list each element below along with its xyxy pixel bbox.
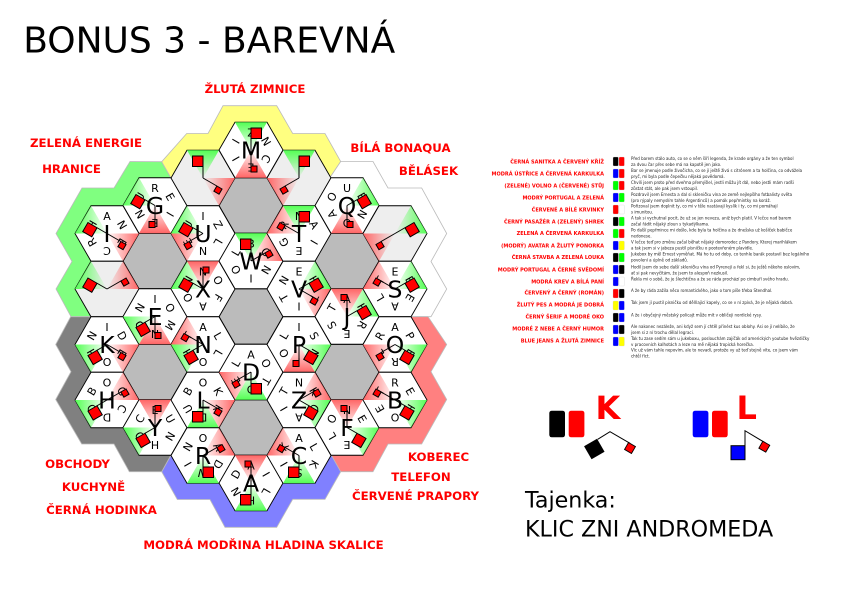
solution [524,487,773,543]
tile X: A [199,300,207,312]
tile Z: O [306,401,322,416]
clue table: story text [630,156,810,358]
tile J: H [354,301,369,315]
tile H: D [103,410,111,424]
tile Q: N [354,207,369,221]
tile M: Z [247,126,255,140]
colored border bands [56,106,447,527]
tile P: S [306,330,321,342]
tile J: J [342,303,350,331]
tile Q: O [342,216,351,229]
tile X: X [195,276,211,304]
clue table: story text: chtěl říct. [631,354,650,358]
tile O: A [391,321,399,334]
clue table: red labels: MODRÉ Z NEBE A ČERNÝ HUMOR [512,325,604,333]
tile N [171,317,235,372]
band: yellow [162,106,341,316]
tile Q [315,178,379,233]
tile V: I [297,300,301,312]
tile I: H [85,218,100,232]
tile J: S [325,319,340,331]
board labels: TELEFON [391,470,451,484]
clue table: story text: za dvou čar přes sebe má na kapotě jen jako. [631,162,721,167]
tile R: A [210,440,225,454]
clue table: story text: a tak jsem si v jabeza pustil písničku o pootevřeném plavidle. [631,246,753,250]
tile C [267,428,331,483]
tile I: E [114,236,129,248]
tile D: D [242,358,260,386]
tile Q: U [343,182,351,195]
tile P [267,317,331,372]
tile P: O [276,346,292,360]
tile V: V [291,276,307,304]
solution: KLIC ZNI ANDROMEDA [525,517,773,543]
tile M: I [230,137,243,146]
board labels: KOBEREC [408,450,469,464]
tile S: S [388,276,402,304]
clue table: red labels: ŽLUTÝ PES A MODRÁ JE DOBRÁ [517,301,604,309]
board labels: ZELENÁ ENERGIE [30,135,142,150]
tile L: L [196,386,210,414]
tile P: P [292,331,306,359]
tile Z [267,372,331,428]
tile V: N [277,274,292,287]
tile U: N [199,244,207,257]
tile J: A [343,293,351,306]
tile A: H [247,494,255,506]
board labels: ŽLUTÁ ZIMNICE [205,81,305,96]
board labels: ČERNÁ HODINKA [46,502,158,517]
tile G: U [133,190,148,204]
tile R: W [197,466,208,479]
clue table: story text: Tak jsem jí pustil písničku od dělňající kapely, co se v ní zpívá, že je nějaká dobrá. [630,300,793,305]
tile E: O [162,301,178,315]
tile O [363,317,427,372]
icon: connector K [584,432,635,459]
tile H: O [103,376,112,390]
clue table: red labels [492,157,605,345]
board labels: HRANICE [42,162,101,176]
tile S [363,261,427,317]
tile L: O [199,376,208,390]
tile C: L [307,441,321,454]
tile D: E [229,374,244,387]
tile J [315,289,379,344]
band: blue [162,316,341,527]
tile J: T [324,302,340,315]
tile Y: C [133,412,148,426]
tile B: B [387,386,403,414]
tile O: R [391,355,399,368]
tile F: F [340,414,354,442]
tile W: O [228,262,244,277]
board labels [30,81,480,552]
tile B: R [391,376,399,390]
band: green [56,162,251,317]
tile B [363,372,427,428]
tile O: B [402,346,417,360]
clue table: story text: Před barem stálo auto, co se o něm šíří legenda, že krade orgány a že ten symbol [631,156,794,161]
tile W: L [229,246,244,258]
tile X [171,261,235,317]
tile M: E [247,160,254,174]
clue table: story text: s imunitou. [631,210,653,214]
tile S: E [402,291,417,304]
tile I: A [103,210,111,223]
tile X: N [199,266,207,278]
legend example K [549,389,635,459]
tile N: O [198,355,207,368]
tile M: I [230,154,243,163]
tile U: U [181,218,196,232]
clue table: red labels: ČERNÁ STAVBA A ZELENÁ LOUKA [512,254,604,261]
tile T: T [291,220,307,248]
tile X: O [210,273,226,288]
blank tile right [363,206,427,261]
tile R: I [182,459,195,469]
tile C: A [295,432,303,445]
tile F: E [343,438,350,451]
tile Z: N [295,376,303,390]
board labels: MODRÁ MODŘINA HLADINA SKALICE [143,537,384,552]
tile C: S [295,466,302,479]
tile Y: H [151,438,159,451]
tile V: E [296,266,303,278]
tile C: I [278,459,291,469]
tile H: G [114,385,129,398]
tile Y: O [132,429,148,443]
tile K: O [102,355,111,368]
tile S: B [402,274,417,287]
clue table: story text: Pořizoval jsem doplnit ty, co mi v těle nastávají kyslík i ty, co mi pomáhají [631,204,779,208]
clue table: color chips [613,157,624,346]
tile U: Z [210,218,225,232]
tile G: R [151,182,159,195]
clue table: red labels: ZELENÁ A ČERVENÁ KARKULKA [517,230,604,237]
tile N: L [210,347,225,360]
tile K: D [114,329,129,343]
tile Z: Z [291,386,307,414]
clue table: red labels: MODRÝ PORTUGAL A ČERNÉ SVĚDOMÍ [498,266,604,274]
clue table: red labels: ČERNÝ ŠERIF A MODRÉ OKO [525,313,604,321]
tile R: R [195,442,211,470]
clue table: red labels: MODRÝ PORTUGAL A ZELENÁ [522,195,604,202]
clue table: red labels: ČERNÁ SANITKA A ČERVENÝ KŘÍŽ [510,157,604,165]
clue table: story text: jsem si z ní trochu dělal legraci. [630,330,694,335]
tile N: A [199,321,207,334]
tile Q: O [324,190,340,204]
tile K: E [114,347,129,359]
tile E: N [151,327,159,340]
blank tile left [75,261,139,317]
clue table: story text: A že i obyčejný městský policajt může mít v obličeji nordické rysy. [631,312,762,318]
tile A: A [243,470,259,498]
blank tile top right [267,150,331,206]
tile D: O [246,382,255,396]
tile R: D [210,457,225,471]
tile D: O [258,356,274,371]
tile A: N [229,485,244,498]
tile T: I [307,237,320,247]
chips: blue red [693,411,728,437]
tile S: L [373,291,387,303]
clue table: story text: Řekla mi o sobě, že je šlechtična a že se ráda prochází po cimbuří svého hradu. [631,276,789,282]
band: red [251,316,447,472]
clue table: story text: ať si pak nevyčítám, že jsem to alespoň nezkusil. [631,270,728,276]
tile H [75,372,139,428]
tile S: E [392,266,399,278]
clue table: story text: začal řádit nějaký zloun s tykadýlkama. [631,222,709,226]
tile H: C [114,402,129,415]
tile A: A [247,460,255,472]
board labels: OBCHODY [45,457,110,471]
tile P: N [306,346,321,360]
tile D: L [229,357,244,369]
tile E: E [148,303,162,331]
tile U: I [201,210,205,223]
tile M [219,122,283,178]
tile U: U [194,220,212,248]
tile K [75,317,139,372]
tile I [75,206,139,261]
tile O: P [402,330,417,342]
gray hexes [123,178,379,455]
clue table: story text: povolení a úplně od základů. [631,258,688,262]
tile J: R [354,318,369,332]
tile Z: A [295,410,303,424]
clue table: story text: zůstat stát, ale pak jsem vstoupil. [631,186,698,191]
tile U: E [181,236,196,248]
tile W: O [258,245,274,260]
tile W [219,233,283,289]
clue table: story text: Pozdravil jsem Ernesta a dal si skleničku vína ze země nejlepšího fotbalisty světa [631,192,793,197]
tile N: T [180,330,196,343]
clue table: red labels: ČERNÝ PASAŽÉR A (ZELENÝ) SHREK [504,217,605,225]
clue table: story text: A tak si vychutnal pocit, že už se jen nevezu, aniž bych platil. V lečce nad barem [631,216,791,220]
tile I: C [103,244,111,257]
tile N: H [181,346,196,360]
tile T: N [295,210,303,223]
tile L: K [210,402,225,416]
tile J: E [343,327,350,340]
tile Q: B [354,190,369,204]
tile G [123,178,187,233]
tile T: R [277,218,292,232]
tile N: L [211,330,225,343]
tile H: H [98,386,116,414]
tile E: D [133,318,148,332]
hex board [75,122,427,511]
tile V: H [306,274,321,287]
tile F: L [325,429,339,442]
tile W: N [258,263,273,276]
clue table: red labels: MODRÁ ÚSTŘICE A ČERVENÁ KARKULKA [492,171,604,178]
tile A [219,455,283,511]
tile M: M [241,136,261,164]
title: BONUS 3 - BAREVNÁ [23,20,396,62]
tile V: T [306,290,322,304]
tile W: I [249,272,253,284]
tile I: N [114,218,129,232]
clue table: story text: (pro rýpaly nemyslím tahle Argentinců) a pomák pepřmintky na koráž. [631,198,771,203]
tile N: N [194,331,212,359]
tile C: K [306,458,321,471]
tile X: N [181,274,196,287]
tile K: H [85,346,100,360]
tile E: M [162,318,178,332]
tile B: O [390,410,399,424]
letter K: K [596,389,622,427]
tile F: O [324,412,340,426]
tile K: N [85,329,100,343]
clue table: story text: v pracovních kalhotách a leze na mě nějaká tropická horečka. [631,342,754,347]
tile X: F [211,292,225,303]
tile V [267,261,331,317]
tile L: K [210,385,226,399]
tile L [171,372,235,428]
tile K: K [99,331,115,359]
tile B: T [372,385,388,399]
tile B: H [402,402,417,415]
tile D: T [258,373,274,387]
blank tile top left [171,150,235,206]
tile Z: K [306,385,322,399]
tile C: K [277,440,292,453]
clue table: story text: pryč, mi byla podle čepečku nějaká povědomá. [631,174,725,179]
tile F: N [343,404,351,417]
tile E: N [133,301,148,315]
tile R: N [181,440,196,454]
tile T: A [306,218,321,232]
tile A: I [259,470,272,479]
tile S: T [372,274,388,288]
band: white [251,162,447,317]
board labels: BĚLÁSEK [399,163,459,178]
tile L: U [181,402,196,415]
tile L: D [199,410,207,424]
tile O: L [373,346,387,359]
tile Y [123,400,187,455]
tile H: B [85,385,100,398]
clue table: story text: Chvíli jsem proto před dveřma přemýšlel, jestli můžu jít dál, nebo jestli mám radši [631,180,794,185]
tile G: I [163,209,176,219]
tile M: N [258,135,273,148]
tile I: R [85,235,100,249]
tile F [315,400,379,455]
clue table: red labels: ČERVENÝ A ČERNÝ (ROMÁN) [524,290,604,297]
tile G: G [146,192,164,220]
chips: black red [549,411,584,437]
band: gray [56,316,251,472]
tile A: L [258,486,273,498]
tile G: E [151,216,158,229]
clue table: story text: Jukebox by měl Ernest vyměňat. Má ho tu od doby, co tenhle barák postavil bez legálního [630,252,810,256]
clue table: story text: A že by ráda zažila něco romantického, jako o tom píše třeba Stendhal. [631,288,772,293]
board labels: KUCHYNĚ [62,479,125,494]
tile U: L [210,236,225,249]
tile Z: T [276,385,292,399]
tile T [267,206,331,261]
tile F: E [354,413,369,425]
tile Q: Q [338,192,356,220]
tile Y: Y [147,414,163,442]
tile T: E [295,244,302,257]
clue table: red labels: BLUE JEANS A ŽLUTÁ ZIMNICE [521,337,605,345]
tile B: E [373,402,388,415]
solution: Tajenka: [524,487,616,513]
tile E: I [153,293,157,306]
tile E [123,289,187,344]
tile D: A [247,348,255,362]
tile P: I [297,321,301,334]
tile T: G [277,235,292,249]
tile Y: E [152,404,159,417]
tile K: I [105,321,109,334]
tile Y: U [162,412,177,426]
tile R [171,428,235,483]
tile B: E [402,385,417,398]
clue table: red labels: (MODRÝ) AVATAR A ŽLUTÝ PONORKA [501,241,604,249]
clue table: story text: Víc už vám tahle nepovím, ale to nevadí, protože vy už teď stejně víte, co jsem vám [631,348,798,352]
clue table: red labels: ČERVENÉ A BÍLÉ KRVINKY [532,205,604,213]
tile X: O [180,290,196,305]
clue table: story text: Tak tu zase sedím sám u jukeboxu, poslouchám zajíčák od amerických youtube hvězdičky [630,336,810,341]
tile R: O [199,432,208,445]
clue table: story text: Po další pepřmince mi došlo, kde byla ta holčina a že dnešska už košíček babičce [631,228,793,232]
tile W: B [247,238,255,250]
tile Z: I [278,404,291,413]
tile P: L [277,329,292,342]
tile U [171,206,235,261]
tile F: I [355,431,368,441]
tile D [219,344,283,400]
tile O: O [386,331,404,359]
tile Y: N [162,429,177,443]
tile M: C [258,152,273,165]
tile H: O [84,401,100,416]
tile G: N [133,207,148,221]
tile L: B [181,385,196,398]
tile A: D [229,468,244,481]
tile C: C [291,442,307,470]
tile I: I [104,220,110,248]
board labels: ČERVENÉ PRAPORY [352,488,480,503]
tile V: T [277,291,292,305]
tile P: I [297,355,301,368]
board labels: BÍLÁ BONAQUA [350,140,451,155]
letter L: L [736,389,757,427]
legend example L [693,389,770,460]
icon: connector L [731,431,770,460]
tile W: W [239,248,263,276]
tile O: R [373,329,388,343]
tile S: A [391,300,399,312]
tile G: E [162,191,177,203]
clue table: story text: nedonese. [631,234,652,238]
clue table: story text: Hodil jsem do sebe další skleničku vína od Pyrenejí a řekl si, že ještě někoho oslovím, [631,264,800,270]
tile Q: A [325,207,340,221]
clue table: story text: V lečce teď pro změnu začal běhat nějaký domorodec z Pandory. Kterej marihlákem [631,240,797,244]
clue table: story text: Bar se jmenuje podle živočicha, co se jí ještě živá s citrónem a ta holčina, co odvážela [631,168,803,173]
clue table: red labels: (ZELENÉ) VOLNO A (ČERVENÉ) STŮJ [504,181,604,189]
clue table: red labels: MODRÁ KREV A BÍLÁ PANÍ [531,277,604,285]
clue table: story text: Ale nakonec nezáleže, ani když sem jí chtěl přinést kus oblohy. Asi se jí nelíbilo, že [631,324,795,329]
